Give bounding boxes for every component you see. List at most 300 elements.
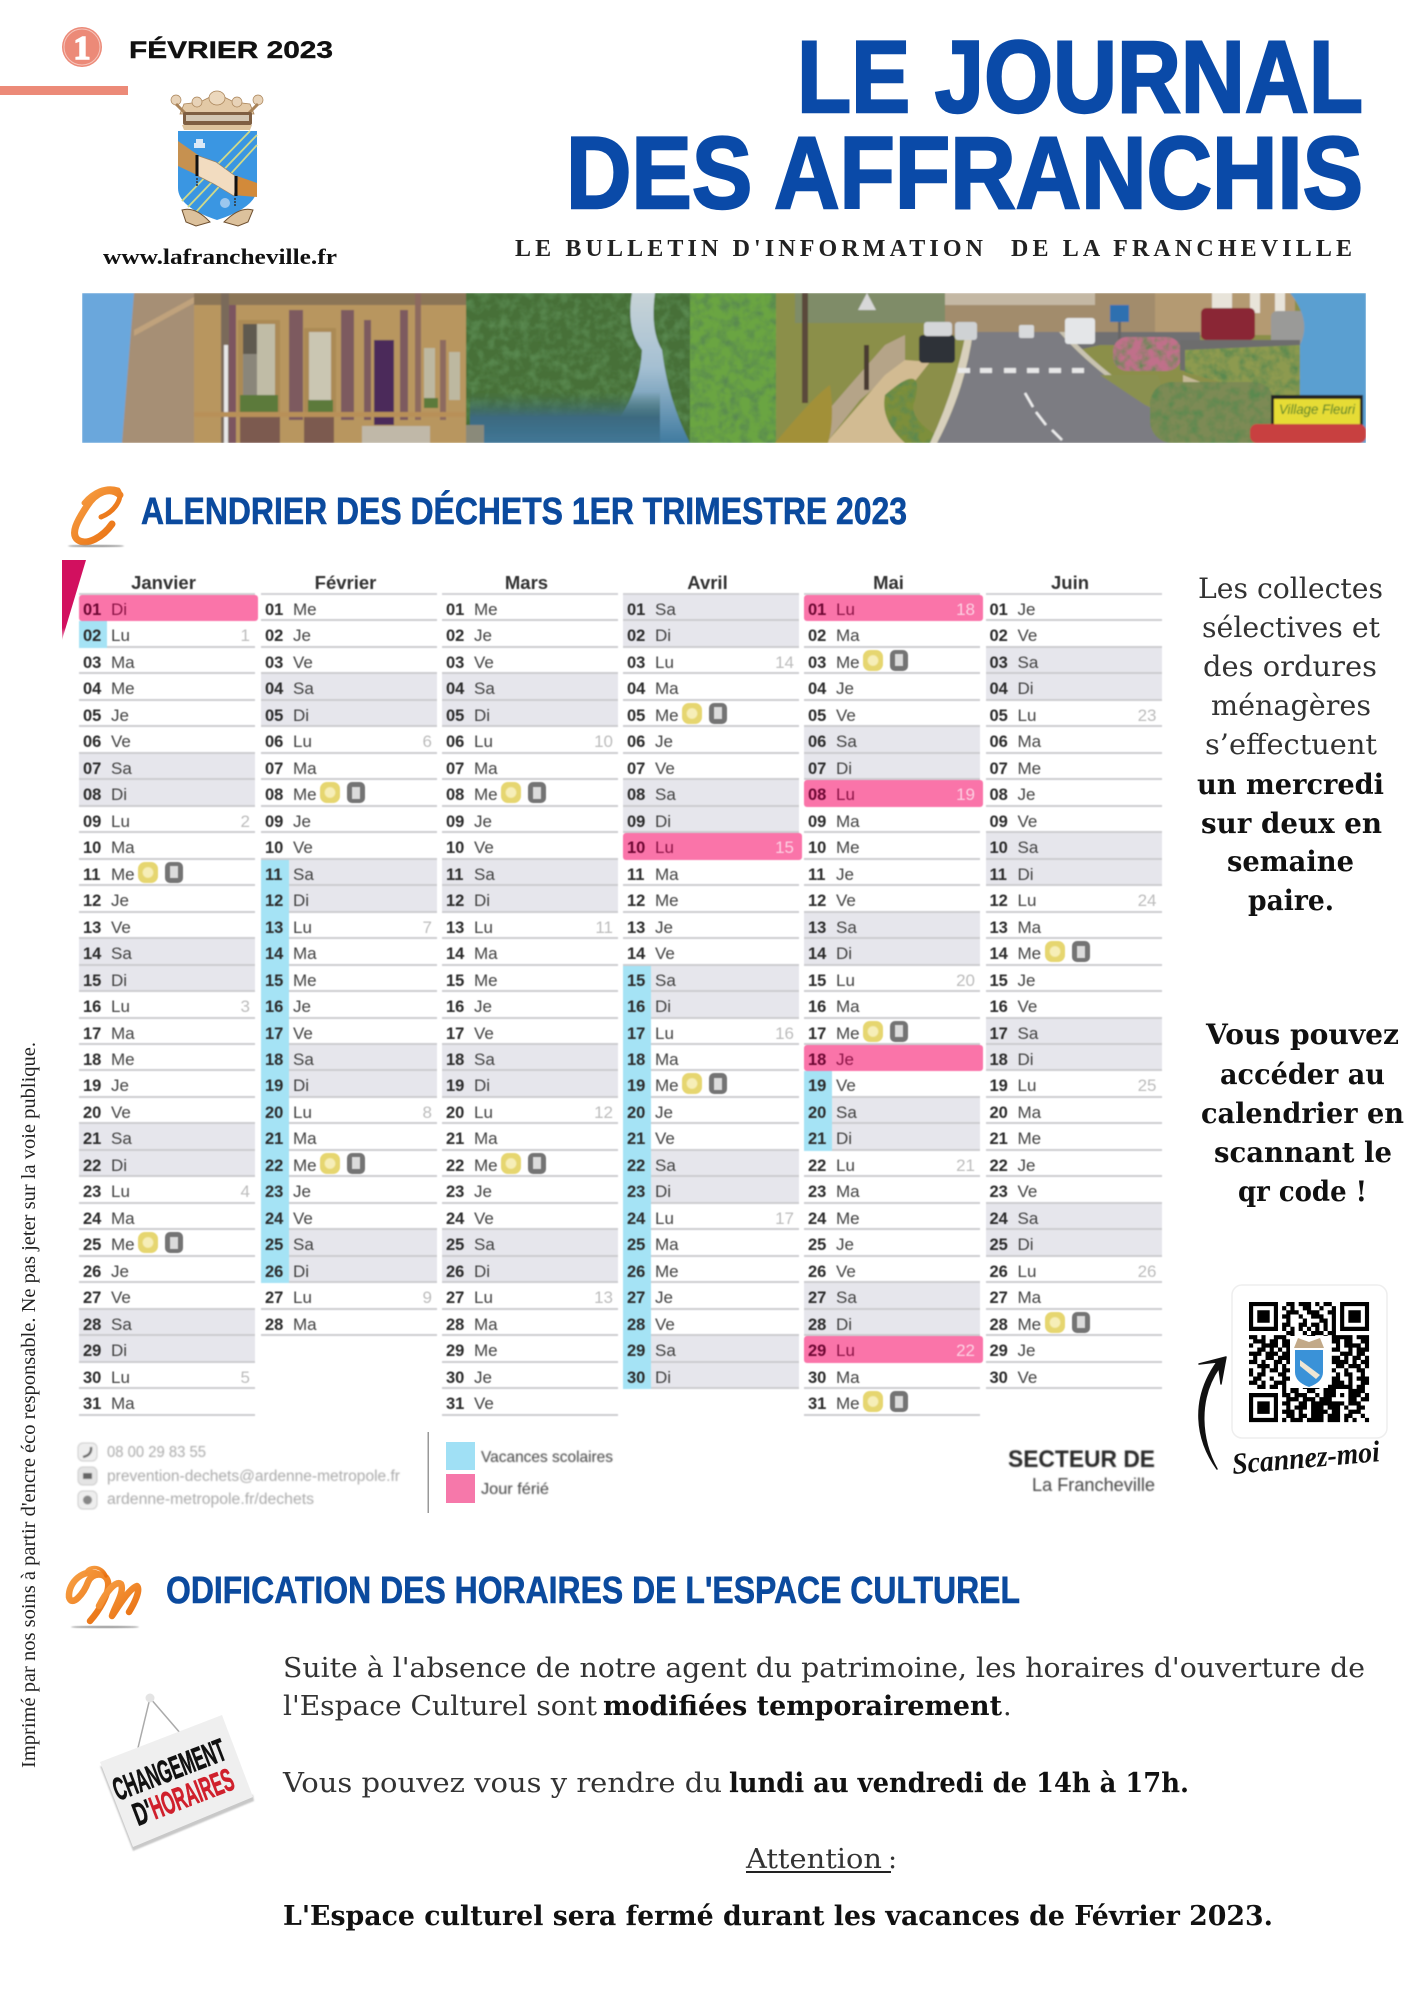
- month column: Juin: Ve: [1018, 812, 1037, 831]
- month column: Janvier: 24: [83, 1210, 101, 1228]
- month column: Février: 19: [265, 1077, 283, 1095]
- month column: Mai: Je: [836, 679, 854, 698]
- month column: Avril: 23: [627, 1183, 645, 1201]
- month column: Avril: [623, 593, 799, 1389]
- month column: Juin: 26: [1138, 1262, 1156, 1281]
- month column: Mars: 28: [446, 1316, 464, 1334]
- month column: Avril: Me: [655, 1076, 679, 1095]
- flower beds: [1100, 337, 1300, 443]
- month column: Février: Lu: [293, 1288, 312, 1307]
- month column: Juin: 01: [990, 601, 1008, 619]
- month column: Juin: 23: [990, 1183, 1008, 1201]
- month column: Janvier: Di: [111, 1341, 127, 1360]
- month column: Mars: Lu: [474, 732, 493, 751]
- month column: Février: 18: [265, 1051, 283, 1069]
- month column: Mai: Je: [836, 1050, 854, 1069]
- month column: Mai: 15: [808, 972, 826, 990]
- month column: Mars: 20: [446, 1104, 464, 1122]
- month column: Avril: Di: [655, 1182, 671, 1201]
- month column: Avril: Je: [655, 1103, 673, 1122]
- month column: Janvier: Lu: [111, 1182, 130, 1201]
- month column: Mai: Ve: [836, 891, 856, 910]
- month column: Mars: Lu: [474, 918, 493, 937]
- month column: Juin: Ve: [1018, 997, 1037, 1016]
- month column: Février: Lu: [293, 918, 312, 937]
- month column: Mars: Je: [474, 1368, 492, 1387]
- icon: hanging sign: D': [128, 1792, 157, 1833]
- month column: Mars: 13: [594, 1288, 613, 1307]
- side note: scan invitation: Vous pouvez: [1205, 1018, 1399, 1051]
- month column: Mars: 17: [446, 1024, 464, 1042]
- month column: Mai: 12: [808, 892, 826, 910]
- month column: Janvier: 10: [83, 839, 101, 857]
- month column: Mai: Di: [836, 1129, 852, 1148]
- month column: Avril: Ve: [655, 1315, 675, 1334]
- month column: Juin: 05: [990, 707, 1008, 725]
- month column: Février: Di: [293, 891, 309, 910]
- month column: Mars: Lu: [474, 1103, 493, 1122]
- month column: Mars: 10: [446, 839, 464, 857]
- month column: Juin: 04: [990, 680, 1008, 698]
- month column: Avril: 01: [627, 601, 645, 619]
- blue backdrop: [1290, 293, 1366, 443]
- month column: Avril: Ma: [655, 1235, 679, 1254]
- month column: Janvier: 06: [83, 733, 101, 751]
- month column: Mai: 28: [808, 1316, 826, 1334]
- month column: Janvier: 21: [83, 1130, 101, 1148]
- month column: Février: Me: [293, 971, 317, 990]
- month column: Février: Sa: [293, 865, 314, 884]
- month column: Janvier: Sa: [111, 1129, 132, 1148]
- month column: Mai: 18: [808, 1051, 826, 1069]
- month column: Janvier: 26: [83, 1263, 101, 1281]
- month column: Mars: 21: [446, 1130, 464, 1148]
- month column: Février: Ma: [293, 944, 317, 963]
- month column: Mars: Me: [474, 971, 498, 990]
- month column: Mars: 29: [446, 1342, 464, 1360]
- month column: Mai: 04: [808, 680, 826, 698]
- icon: letter M: [69, 1567, 139, 1628]
- road: [930, 332, 1222, 443]
- month column: Mars: Me: [474, 785, 498, 804]
- month column: Avril: 13: [627, 919, 645, 937]
- calendar legend: [428, 1432, 613, 1513]
- month column: Mars: Ma: [474, 759, 498, 778]
- month column: Avril: 27: [627, 1289, 645, 1307]
- month column: Février: 26: [265, 1263, 283, 1281]
- body text: hours change: lundi au vendredi de 14h à 17h.: [729, 1768, 1189, 1799]
- month column: Février: 05: [265, 707, 283, 725]
- month column: Mai: 16: [808, 998, 826, 1016]
- month column: Juin: Me: [1018, 1129, 1041, 1148]
- month column: Avril: 02: [627, 627, 645, 645]
- month column: Février: 09: [265, 813, 283, 831]
- month column: Mai: Ma: [836, 1182, 860, 1201]
- month column: Avril: Sa: [655, 1156, 676, 1175]
- month column: Mars: 07: [446, 760, 464, 778]
- side note: collection schedule: paire.: [1248, 884, 1334, 917]
- month column: Février: 01: [265, 601, 283, 619]
- notice heading: Attention: [745, 1844, 882, 1875]
- month column: Mai: 20: [808, 1104, 826, 1122]
- month column: Mai: Lu: [836, 600, 855, 619]
- month column: Juin: 06: [990, 733, 1008, 751]
- month column: Janvier: 04: [83, 680, 101, 698]
- month column: Avril: 17: [775, 1209, 794, 1228]
- month column: Janvier: Di: [111, 971, 127, 990]
- month column: Mai: 26: [808, 1263, 826, 1281]
- month column: Avril: Sa: [655, 1341, 676, 1360]
- month column: Mai: 25: [808, 1236, 826, 1254]
- month column: Avril: Je: [655, 732, 673, 751]
- month column: Mars: 03: [446, 654, 464, 672]
- month column: Juin: 24: [990, 1210, 1008, 1228]
- month column: Avril: 16: [775, 1024, 794, 1042]
- month column: Mars: Ve: [474, 1394, 494, 1413]
- month column: Juin: Di: [1018, 1050, 1034, 1069]
- month column: Mars: 24: [446, 1210, 464, 1228]
- month column: Mars: 14: [446, 945, 464, 963]
- month column: Mars: 30: [446, 1369, 464, 1387]
- month column: Avril: Sa: [655, 785, 676, 804]
- month column: Mai: 27: [808, 1289, 826, 1307]
- month column: Mars: [442, 593, 618, 1416]
- month name: Janvier: Janvier: [131, 572, 196, 593]
- month column: Mars: 11: [446, 866, 463, 884]
- month column: Juin: 26: [990, 1263, 1008, 1281]
- month column: Février: 04: [265, 680, 283, 698]
- month column: Mai: 07: [808, 760, 826, 778]
- month column: Juin: Me: [1018, 759, 1041, 778]
- month column: Mars: Di: [474, 891, 490, 910]
- month column: Janvier: Me: [111, 1050, 135, 1069]
- month column: Mars: Sa: [474, 1050, 495, 1069]
- month column: Février: Di: [293, 706, 309, 725]
- month column: Janvier: Me: [111, 865, 135, 884]
- month column: Février: Je: [293, 997, 311, 1016]
- month column: Juin: Ma: [1018, 918, 1041, 937]
- month column: Mars: Sa: [474, 865, 495, 884]
- month column: Mars: 27: [446, 1289, 464, 1307]
- month column: Mai: Je: [836, 865, 854, 884]
- month column: Janvier: 22: [83, 1157, 101, 1175]
- month column: Janvier: Ma: [111, 1394, 135, 1413]
- month column: Mars: 13: [446, 919, 464, 937]
- icon: hanging sign: [100, 1694, 254, 1851]
- month column: Juin: 09: [990, 813, 1008, 831]
- month column: Janvier: 28: [83, 1316, 101, 1334]
- body text: hours change: l'Espace Culturel sont: [283, 1691, 597, 1722]
- month column: Mars: Sa: [474, 679, 495, 698]
- month column: Janvier: 05: [83, 707, 101, 725]
- month column: Avril: 03: [627, 654, 645, 672]
- month column: Avril: 21: [627, 1130, 645, 1148]
- month column: Juin: 28: [990, 1316, 1008, 1334]
- month column: Mai: 11: [808, 866, 825, 884]
- month name: Février: Février: [315, 572, 376, 593]
- month column: Février: Me: [293, 600, 317, 619]
- month column: Mai: 05: [808, 707, 826, 725]
- month column: Février: 07: [265, 760, 283, 778]
- month column: Février: 24: [265, 1210, 283, 1228]
- side note: collection schedule: sur deux en: [1201, 807, 1382, 840]
- QR code card: [1232, 1285, 1387, 1438]
- month column: Janvier: 11: [83, 866, 100, 884]
- side note: collection schedule: ménagères: [1211, 689, 1371, 722]
- month column: Février: 10: [265, 839, 283, 857]
- river and trees: [466, 293, 780, 443]
- body text: hours change: .: [1003, 1691, 1012, 1722]
- month column: Février: Ve: [293, 653, 313, 672]
- month column: Juin: Je: [1018, 971, 1035, 990]
- month column: Juin: 22: [990, 1157, 1008, 1175]
- month column: Mars: 16: [446, 998, 464, 1016]
- month column: Mai: 13: [808, 919, 826, 937]
- month column: Mars: Ma: [474, 1129, 498, 1148]
- month column: Mars: Je: [474, 1182, 492, 1201]
- month column: Février: Je: [293, 812, 311, 831]
- month column: Mai: Me: [836, 1209, 860, 1228]
- month column: Mars: Je: [474, 812, 492, 831]
- month column: Mai: Lu: [836, 1156, 855, 1175]
- town hall facade: [194, 293, 469, 443]
- month column: Avril: 05: [627, 707, 645, 725]
- month column: Janvier: Ma: [111, 1024, 135, 1042]
- month column: Avril: 12: [627, 892, 645, 910]
- month column: Juin: 15: [990, 972, 1008, 990]
- month column: Janvier: Sa: [111, 944, 132, 963]
- website: www.lafrancheville.fr: [103, 244, 337, 269]
- month column: Juin: 27: [990, 1289, 1008, 1307]
- side note: scan invitation: scannant le: [1214, 1136, 1392, 1169]
- month column: Mai: 22: [808, 1157, 826, 1175]
- month column: Juin: Me: [1018, 1315, 1041, 1334]
- month column: Janvier: 12: [83, 892, 101, 910]
- month column: Mai: Sa: [836, 732, 857, 751]
- month column: Juin: [986, 593, 1162, 1389]
- month column: Avril: 16: [627, 998, 645, 1016]
- month column: Mars: Lu: [474, 1288, 493, 1307]
- month column: Mai: Ma: [836, 812, 860, 831]
- body text: hours change: [282, 1653, 1365, 1799]
- park, wall and path: [775, 293, 1306, 443]
- icon: municipal crest: [171, 91, 263, 226]
- month column: Février: Di: [293, 1076, 309, 1095]
- month column: Mai: Me: [836, 838, 860, 857]
- month column: Mars: 25: [446, 1236, 464, 1254]
- month column: Juin: Je: [1018, 600, 1035, 619]
- month column: Janvier: 17: [83, 1024, 101, 1042]
- month column: Avril: 07: [627, 760, 645, 778]
- month column: Janvier: Sa: [111, 759, 132, 778]
- month column: Mai: 22: [956, 1341, 975, 1360]
- month column: Mars: 12: [594, 1103, 613, 1122]
- side note: collection schedule: s’effectuent: [1205, 728, 1378, 761]
- side note: collection schedule: des ordures: [1203, 650, 1377, 683]
- vertical print note: Imprimé par nos soins à partir d'encre éco responsable. Ne pas jeter sur la voie publique.: [19, 1042, 40, 1768]
- village fleuri sign: [1250, 395, 1366, 443]
- title: [566, 20, 1363, 230]
- month column: Janvier: 2: [241, 812, 250, 831]
- month column: Juin: Ma: [1018, 1103, 1041, 1122]
- arrow to QR code: [1199, 1357, 1226, 1469]
- month column: Avril: Lu: [655, 1209, 674, 1228]
- month column: Janvier: Ve: [111, 1288, 131, 1307]
- month column: Mars: Sa: [474, 1235, 495, 1254]
- month column: Avril: Me: [655, 1262, 679, 1281]
- month column: Juin: 13: [990, 919, 1008, 937]
- month column: Avril: 25: [627, 1236, 645, 1254]
- month column: Janvier: 07: [83, 760, 101, 778]
- month column: Avril: 20: [627, 1104, 645, 1122]
- month column: Février: 13: [265, 919, 283, 937]
- month column: Mai: Sa: [836, 1103, 857, 1122]
- month column: Février: Ma: [293, 759, 317, 778]
- month column: Avril: 14: [775, 653, 794, 672]
- month column: Avril: Di: [655, 812, 671, 831]
- month column: Avril: 15: [775, 838, 794, 857]
- month column: Février: 16: [265, 998, 283, 1016]
- month column: Juin: Sa: [1018, 653, 1038, 672]
- month column: Janvier: 16: [83, 998, 101, 1016]
- month column: Juin: Lu: [1018, 1262, 1036, 1281]
- month column: Février: Ve: [293, 1024, 313, 1042]
- month column: Juin: 16: [990, 998, 1008, 1016]
- month column: Janvier: Je: [111, 1076, 129, 1095]
- month column: Janvier: 08: [83, 786, 101, 804]
- side note: collection schedule: semaine: [1227, 845, 1354, 878]
- month column: Mai: Ma: [836, 997, 860, 1016]
- month column: Janvier: 19: [83, 1077, 101, 1095]
- month column: Mars: Me: [474, 1341, 498, 1360]
- month name: Mai: Mai: [873, 572, 904, 593]
- month column: Avril: Je: [655, 1288, 673, 1307]
- month column: Mars: 22: [446, 1157, 464, 1175]
- month column: Janvier: 15: [83, 972, 101, 990]
- month column: Avril: Sa: [655, 600, 676, 619]
- scan me caption: Scannez-moi: [1231, 1435, 1382, 1481]
- month column: Janvier: 1: [241, 626, 250, 645]
- month column: Avril: Me: [655, 891, 679, 910]
- month column: Janvier: 23: [83, 1183, 101, 1201]
- month column: Avril: Di: [655, 1368, 671, 1387]
- month column: Janvier: 25: [83, 1236, 101, 1254]
- month column: Avril: Lu: [655, 838, 674, 857]
- month column: Mai: 31: [808, 1395, 826, 1413]
- month column: Janvier: Me: [111, 1235, 135, 1254]
- building side wall: [122, 293, 196, 443]
- month column: Juin: 11: [990, 866, 1007, 884]
- heading: calendar: ALENDRIER DES DÉCHETS 1ER TRIMESTRE 2023: [141, 489, 907, 533]
- month column: Juin: Ma: [1018, 1288, 1041, 1307]
- month column: Janvier: Di: [111, 785, 127, 804]
- month column: Janvier: Lu: [111, 997, 130, 1016]
- month column: Mars: 06: [446, 733, 464, 751]
- month column: Mai: 21: [956, 1156, 975, 1175]
- month column: Février: Sa: [293, 1050, 314, 1069]
- icon: hanging sign: HORAIRES: [145, 1761, 239, 1826]
- month column: Janvier: Je: [111, 1262, 129, 1281]
- month column: Mars: Ve: [474, 1209, 494, 1228]
- month column: Juin: Di: [1018, 1235, 1034, 1254]
- month column: Juin: 23: [1138, 706, 1156, 725]
- month column: Juin: Lu: [1018, 891, 1036, 910]
- month column: Mars: 12: [446, 892, 464, 910]
- side note: collection schedule: un mercredi: [1197, 768, 1384, 801]
- month column: Avril: Di: [655, 626, 671, 645]
- month column: Avril: 10: [627, 839, 645, 857]
- month column: Mars: Je: [474, 626, 492, 645]
- month column: Juin: 03: [990, 654, 1008, 672]
- month column: Mai: 02: [808, 627, 826, 645]
- month column: Mars: Ve: [474, 1024, 494, 1042]
- month column: Juin: Sa: [1018, 1024, 1038, 1042]
- month column: Mai: Ma: [836, 1368, 860, 1387]
- month column: Juin: Ve: [1018, 626, 1037, 645]
- month column: Mai: 29: [808, 1342, 826, 1360]
- month badge: 1: [74, 30, 90, 67]
- month column: Mars: 04: [446, 680, 464, 698]
- month column: Février: 15: [265, 972, 283, 990]
- month column: Février: 06: [265, 733, 283, 751]
- month column: Mai: 20: [956, 971, 975, 990]
- month column: Mai: [804, 593, 980, 1416]
- month column: Février: 21: [265, 1130, 283, 1148]
- month column: Juin: Sa: [1018, 838, 1038, 857]
- sector label: [1008, 1446, 1155, 1495]
- heading: opening hours: ODIFICATION DES HORAIRES DE L'ESPACE CULTUREL: [166, 1570, 1020, 1612]
- month column: Mars: Di: [474, 706, 490, 725]
- month name: Avril: Avril: [687, 572, 728, 593]
- month column: Mars: Ma: [474, 1315, 498, 1334]
- month column: Avril: 18: [627, 1051, 645, 1069]
- month column: Juin: Lu: [1018, 1076, 1036, 1095]
- month column: Janvier: [79, 593, 255, 1416]
- month column: Février: 23: [265, 1183, 283, 1201]
- month column: Mars: Di: [474, 1076, 490, 1095]
- sector label: SECTEUR DE: [1008, 1446, 1155, 1473]
- month column: Février: 03: [265, 654, 283, 672]
- month name: Juin: Juin: [1051, 572, 1089, 593]
- month column: Avril: 06: [627, 733, 645, 751]
- month column: Janvier: Ve: [111, 732, 131, 751]
- month column: Avril: Lu: [655, 653, 674, 672]
- month column: Mars: 01: [446, 601, 464, 619]
- month column: Avril: Ve: [655, 944, 675, 963]
- month column: Février: 12: [265, 892, 283, 910]
- month column: Avril: 29: [627, 1342, 645, 1360]
- month column: Juin: Di: [1018, 679, 1034, 698]
- month column: Avril: 08: [627, 786, 645, 804]
- month column: Janvier: Ve: [111, 918, 131, 937]
- month column: Avril: Ma: [655, 865, 679, 884]
- month name: Mars: Mars: [505, 572, 548, 593]
- month column: Avril: 14: [627, 945, 645, 963]
- body text: hours change: modifiées temporairement: [603, 1691, 1003, 1722]
- month column: Avril: Lu: [655, 1024, 674, 1042]
- icon: hanging sign: CHANGEMENT: [108, 1732, 231, 1808]
- month column: Avril: 17: [627, 1024, 645, 1042]
- month column: Janvier: 13: [83, 919, 101, 937]
- month column: Avril: 09: [627, 813, 645, 831]
- buildings at road end: [945, 293, 1295, 335]
- month column: Février: 8: [423, 1103, 432, 1122]
- month column: Mai: Ve: [836, 706, 856, 725]
- month column: Janvier: Di: [111, 1156, 127, 1175]
- month column: Mars: 08: [446, 786, 464, 804]
- month column: Avril: Sa: [655, 971, 676, 990]
- month column: Mai: Di: [836, 944, 852, 963]
